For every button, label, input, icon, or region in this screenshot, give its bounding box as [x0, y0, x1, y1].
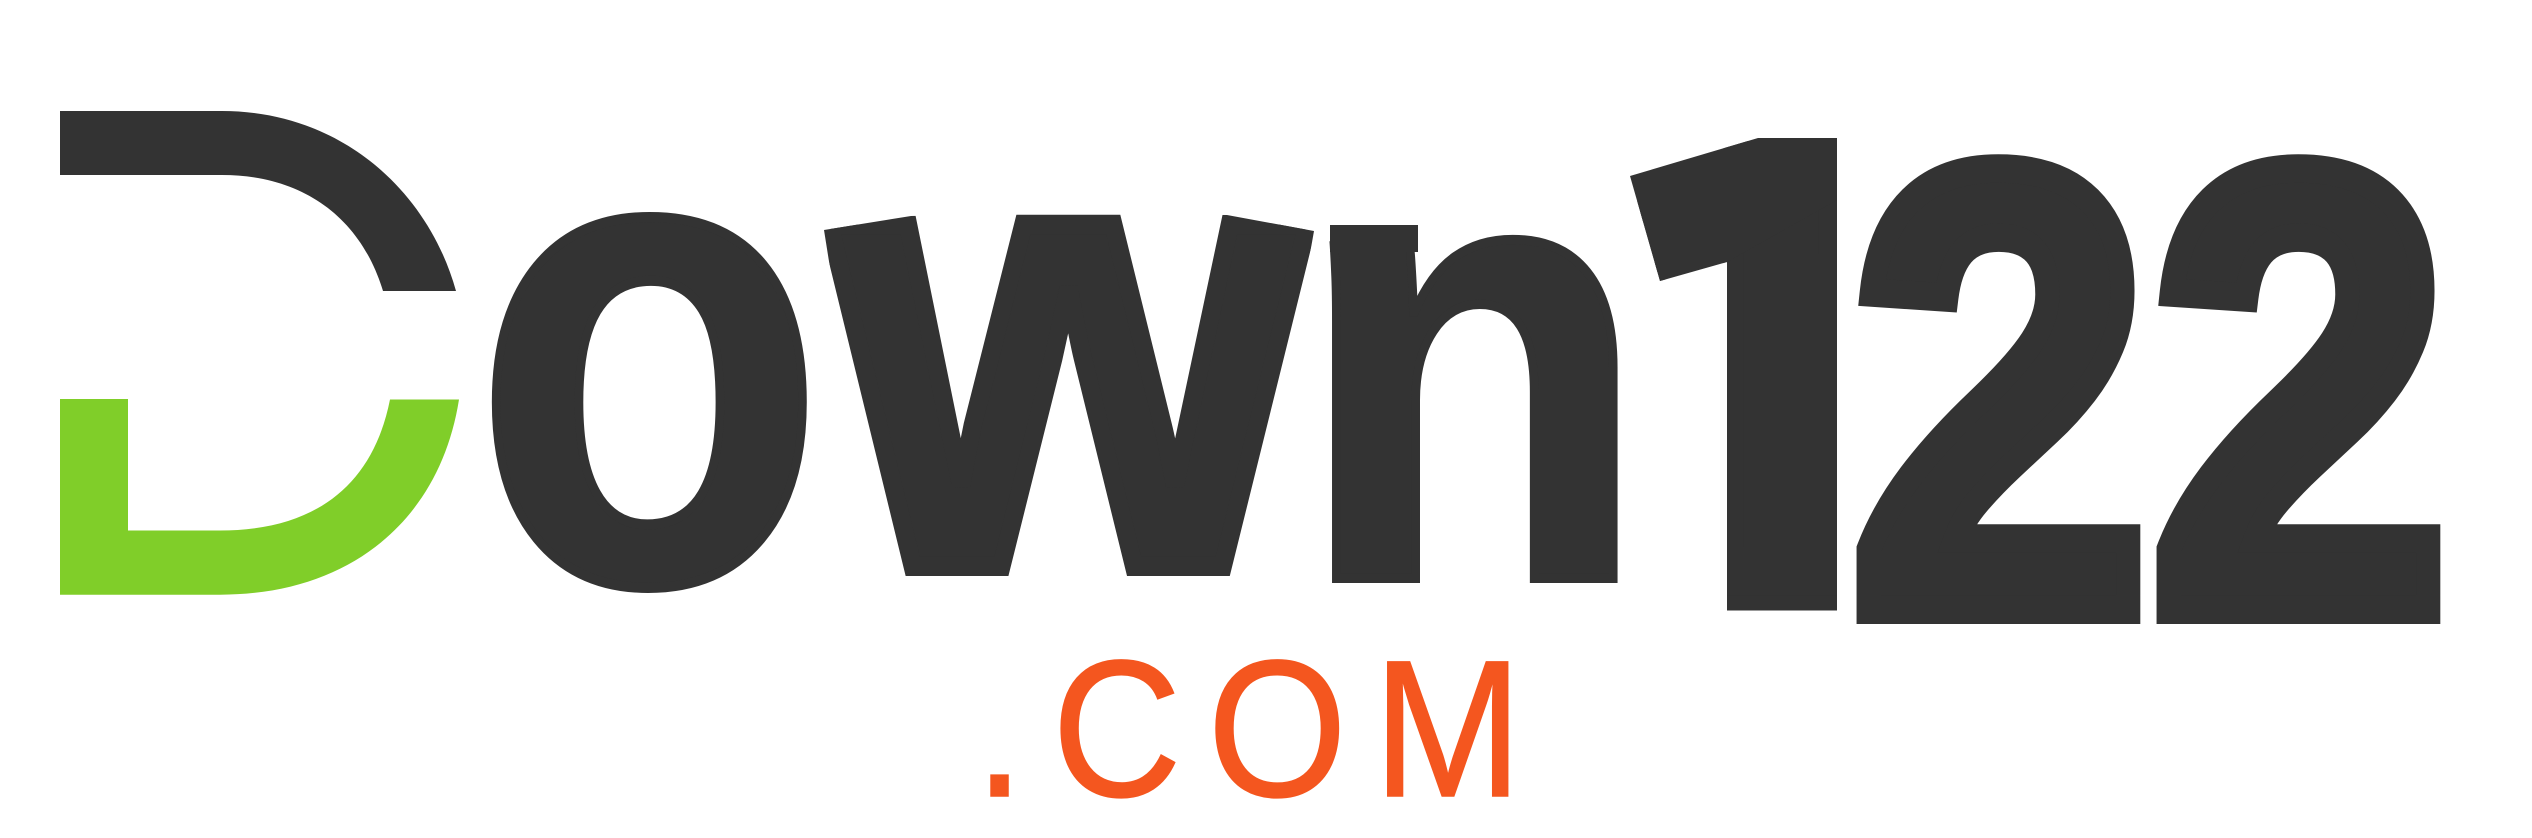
digit 2 first: 2 — [1850, 38, 2150, 744]
letter C: C — [1052, 619, 1182, 838]
dot: . — [975, 619, 1024, 838]
letter O: O — [1208, 619, 1347, 838]
wordmark: own122 — [492, 138, 2440, 624]
domain suffix: .COM — [975, 619, 1522, 838]
digit 1: 1 — [1570, 8, 1959, 746]
D upper arc, dark — [60, 111, 456, 291]
D lower arc, green — [60, 399, 459, 595]
icon: stylised letter D mark — [60, 111, 459, 595]
letter w: w — [821, 0, 1308, 704]
digit 2 second: 2 — [2150, 38, 2450, 744]
digit 1 — [1630, 138, 1837, 610]
letter M: M — [1373, 619, 1522, 838]
letter n: n — [1296, 10, 1649, 713]
logo: Down122.com — [60, 111, 2440, 799]
